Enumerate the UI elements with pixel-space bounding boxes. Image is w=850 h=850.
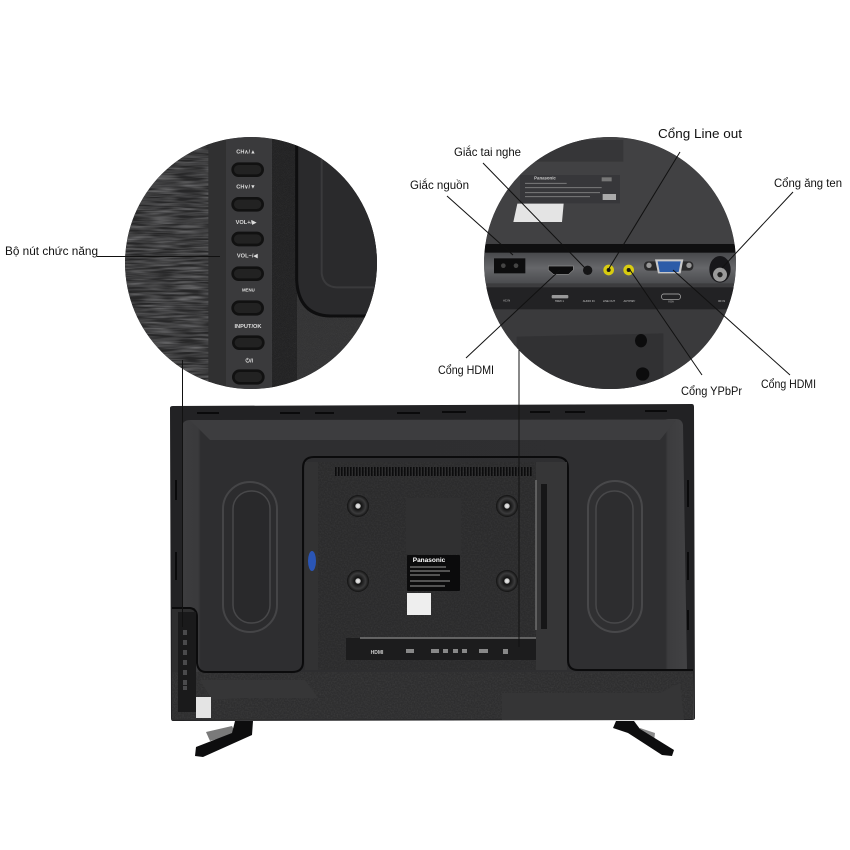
port labels band	[470, 287, 750, 309]
leader line: function buttons	[97, 256, 220, 258]
port labels band: VGA	[668, 299, 674, 303]
vesa mount: bottom right	[496, 570, 518, 592]
button labels: CH∨/▼	[236, 185, 256, 191]
detail circle: function buttons	[125, 137, 377, 389]
button labels: INPUT/OK	[234, 324, 262, 330]
leader line: hdmi	[466, 270, 560, 358]
oval right	[588, 481, 642, 632]
black rating label	[406, 498, 461, 591]
vesa mount: top right	[496, 495, 518, 517]
television rear	[170, 404, 695, 757]
button labels	[234, 149, 262, 365]
port labels band: AC IN	[503, 298, 510, 302]
leader line: headphone jack	[483, 163, 585, 268]
port labels band: RF IN	[718, 299, 725, 303]
label: hdmi right: Cổng HDMI	[761, 377, 816, 391]
black rating label: Panasonic	[413, 557, 446, 564]
label: hdmi: Cổng HDMI	[438, 363, 494, 377]
white sticker	[407, 593, 431, 615]
hdmi port	[548, 266, 573, 274]
label: function buttons: Bộ nút chức năng	[5, 244, 98, 258]
port labels band: AUDIO IN	[583, 299, 595, 303]
screws	[635, 334, 649, 381]
ypbpr jack	[623, 265, 634, 275]
rim tabs	[176, 411, 688, 630]
leader line: right circle to tv	[518, 350, 520, 647]
connector strip	[346, 638, 536, 660]
textured right	[272, 140, 377, 386]
raised back panel	[172, 419, 694, 720]
leader line: left circle to tv	[182, 360, 184, 627]
leader line: hdmi right	[673, 270, 790, 375]
label: line out: Cổng Line out	[658, 126, 742, 141]
lower textured body	[172, 608, 693, 720]
button labels: CH∧/▲	[236, 149, 256, 155]
upper shading	[190, 420, 676, 440]
leader line: line out	[608, 152, 680, 270]
stand: right	[613, 721, 674, 756]
panasonic sticker text: Panasonic	[534, 176, 556, 181]
label: power: Giắc nguồn	[410, 177, 469, 192]
leader line: antenna	[722, 192, 793, 268]
port labels band: HDMI 1	[555, 299, 564, 303]
stand: left	[195, 721, 253, 757]
inner recess outline	[172, 457, 693, 672]
leader line: ypbpr	[630, 270, 702, 375]
side buttons	[183, 630, 187, 690]
blue badge	[308, 551, 316, 571]
upper rear surface	[486, 137, 734, 244]
dark ledge	[484, 244, 736, 254]
port labels band: LINE OUT	[603, 299, 615, 303]
center mounting plate	[305, 462, 567, 670]
button column	[226, 130, 272, 397]
label: headphone: Giắc tai nghe	[454, 144, 521, 159]
button labels: VOL−/◀	[237, 252, 258, 259]
side control strip	[178, 612, 196, 712]
headphone jack	[583, 266, 592, 275]
button labels: ⏻/I	[246, 358, 254, 365]
leader line: power socket	[447, 196, 513, 255]
button labels: MENU	[242, 287, 255, 292]
oval left	[223, 482, 277, 632]
power socket	[494, 258, 525, 273]
buttons	[233, 164, 263, 383]
moulded corner	[295, 145, 377, 318]
vesa mount: top left	[347, 495, 369, 517]
connector strip: HDMI	[371, 650, 384, 656]
textured casing	[125, 144, 210, 382]
line out jack	[603, 265, 614, 275]
white sticker	[513, 204, 564, 222]
lower chamfer	[200, 680, 318, 700]
antenna connector	[709, 256, 731, 283]
vesa mount: bottom left	[347, 570, 369, 592]
tv casing	[170, 404, 695, 721]
vga port	[644, 259, 693, 273]
label: antenna: Cổng ăng ten	[774, 176, 842, 190]
port labels band: AV/YPbPr	[623, 299, 635, 303]
panasonic sticker text	[525, 176, 616, 200]
lower surface	[493, 310, 727, 389]
warning sticker	[196, 697, 211, 718]
ventilation slots	[335, 467, 532, 476]
label: ypbpr: Cổng YPbPr	[681, 384, 742, 398]
detail circle: ports	[484, 137, 736, 389]
button labels: VOL+/▶	[236, 219, 257, 226]
port plate	[470, 253, 750, 283]
